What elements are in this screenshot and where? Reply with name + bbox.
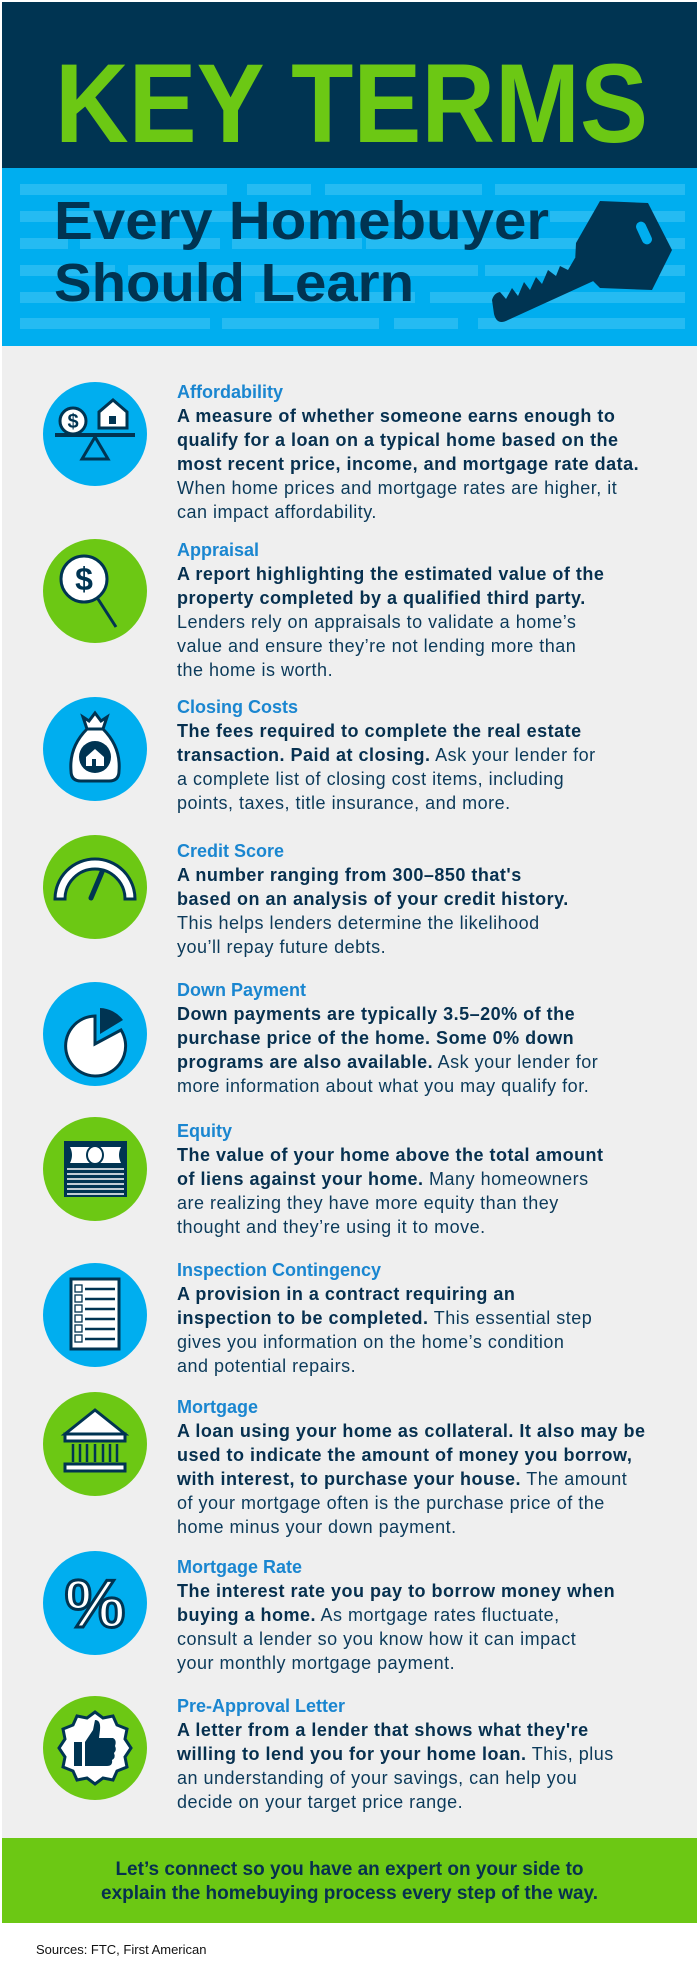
- icon: scale with dollar and house: $: [67, 411, 79, 433]
- text block: purchase price of the home. Some 0% down: [177, 1028, 574, 1048]
- text block: inspection to be completed. This essential step: [177, 1308, 592, 1328]
- text block: are realizing they have more equity than they: [177, 1193, 559, 1213]
- text block: property completed by a qualified third party.: [177, 588, 586, 608]
- text block: A loan using your home as collateral. It also may be: [177, 1421, 645, 1441]
- text block: Inspection Contingency: [177, 1260, 381, 1280]
- term: Pre-Approval Letter: [43, 1696, 614, 1812]
- text block: The value of your home above the total amount: [177, 1145, 604, 1165]
- term: Affordability: [43, 382, 639, 522]
- text block: [177, 1397, 645, 1537]
- text block: When home prices and mortgage rates are higher, it: [177, 478, 617, 498]
- text block: value and ensure they’re not lending more than: [177, 636, 576, 656]
- text block: and potential repairs.: [177, 1356, 356, 1376]
- term: Appraisal: [43, 539, 604, 680]
- text block: with interest, to purchase your house. The amount: [177, 1469, 627, 1489]
- text block: Affordability: [177, 382, 283, 402]
- header: dark band: [2, 2, 697, 168]
- icon: percent: %: [65, 1566, 125, 1642]
- text block: [177, 1557, 615, 1673]
- text block: thought and they’re using it to move.: [177, 1217, 486, 1237]
- text block: [177, 697, 596, 813]
- text block: [177, 980, 598, 1096]
- text block: A letter from a lender that shows what they're: [177, 1720, 589, 1740]
- text block: [177, 1260, 592, 1376]
- text block: [177, 841, 569, 957]
- header: blue band with subtitle: Should Learn: [54, 253, 414, 313]
- icon: money bag: [43, 697, 147, 801]
- icon: magnifier dollar: [43, 539, 147, 643]
- icon: gauge: [43, 835, 147, 939]
- text block: Lenders rely on appraisals to validate a home’s: [177, 612, 576, 632]
- term: Mortgage: [43, 1392, 645, 1537]
- term: Down Payment: [43, 980, 598, 1096]
- text block: A measure of whether someone earns enough to: [177, 406, 615, 426]
- text block: points, taxes, title insurance, and more.: [177, 793, 511, 813]
- text block: more information about what you may qualify for.: [177, 1076, 589, 1096]
- term: Inspection Contingency: [43, 1260, 592, 1376]
- text block: Closing Costs: [177, 697, 298, 717]
- text block: [177, 1121, 604, 1237]
- term: Closing Costs: [43, 697, 596, 813]
- text block: Pre-Approval Letter: [177, 1696, 345, 1716]
- text block: based on an analysis of your credit history.: [177, 889, 569, 909]
- icon: thumbs up badge: [43, 1696, 147, 1800]
- term: Mortgage Rate: [43, 1551, 615, 1673]
- icon: cash stack: [43, 1117, 147, 1221]
- text block: of your mortgage often is the purchase price of the: [177, 1493, 605, 1513]
- header: blue band with subtitle: [2, 168, 697, 346]
- text block: used to indicate the amount of money you borrow,: [177, 1445, 632, 1465]
- text block: Credit Score: [177, 841, 284, 861]
- title: KEY TERMS: KEY TERMS: [55, 41, 648, 166]
- text block: Mortgage Rate: [177, 1557, 302, 1577]
- text block: This helps lenders determine the likelihood: [177, 913, 540, 933]
- text block: you’ll repay future debts.: [177, 937, 386, 957]
- sources: Sources: FTC, First American: [36, 1942, 206, 1957]
- icon: magnifier dollar: $: [75, 561, 93, 597]
- text block: transaction. Paid at closing. Ask your lender for: [177, 745, 596, 765]
- text block: buying a home. As mortgage rates fluctuate,: [177, 1605, 560, 1625]
- panel: terms background: [2, 346, 697, 1838]
- text block: Down payments are typically 3.5–20% of the: [177, 1004, 575, 1024]
- icon: percent: [43, 1551, 147, 1655]
- text block: most recent price, income, and mortgage rate data.: [177, 454, 639, 474]
- text block: the home is worth.: [177, 660, 333, 680]
- text block: A report highlighting the estimated value of the: [177, 564, 604, 584]
- text block: The fees required to complete the real estate: [177, 721, 582, 741]
- icon: key: [492, 201, 672, 322]
- text block: Down Payment: [177, 980, 306, 1000]
- text block: can impact affordability.: [177, 502, 377, 522]
- text block: decide on your target price range.: [177, 1792, 463, 1812]
- text block: A number ranging from 300–850 that's: [177, 865, 522, 885]
- text block: Mortgage: [177, 1397, 258, 1417]
- icon: pie chart: [43, 982, 147, 1086]
- term: Equity: [43, 1117, 604, 1237]
- icon: checklist: [43, 1263, 147, 1367]
- text block: an understanding of your savings, can help you: [177, 1768, 577, 1788]
- callout: green footer band: Let’s connect so you have an expert on your side to: [115, 1859, 584, 1880]
- subtitle: Every Homebuyer: [54, 191, 549, 251]
- text block: gives you information on the home’s condition: [177, 1332, 564, 1352]
- text block: your monthly mortgage payment.: [177, 1653, 455, 1673]
- text block: of liens against your home. Many homeowners: [177, 1169, 589, 1189]
- text block: [177, 1696, 614, 1812]
- text block: [177, 540, 604, 680]
- text block: [177, 382, 639, 522]
- text block: qualify for a loan on a typical home based on the: [177, 430, 619, 450]
- icon: scale with dollar and house: [43, 382, 147, 486]
- text block: consult a lender so you know how it can impact: [177, 1629, 576, 1649]
- text block: a complete list of closing cost items, including: [177, 769, 564, 789]
- text block: programs are also available. Ask your lender for: [177, 1052, 598, 1072]
- text block: The interest rate you pay to borrow money when: [177, 1581, 615, 1601]
- callout: green footer band: [2, 1838, 697, 1923]
- icon: bank: [43, 1392, 147, 1496]
- callout: green footer band: explain the homebuying process every step of the way.: [101, 1883, 598, 1904]
- text block: home minus your down payment.: [177, 1517, 457, 1537]
- text block: willing to lend you for your home loan. This, plus: [177, 1744, 614, 1764]
- term: Credit Score: [43, 835, 569, 957]
- text block: A provision in a contract requiring an: [177, 1284, 515, 1304]
- text block: Equity: [177, 1121, 232, 1141]
- text block: Appraisal: [177, 540, 259, 560]
